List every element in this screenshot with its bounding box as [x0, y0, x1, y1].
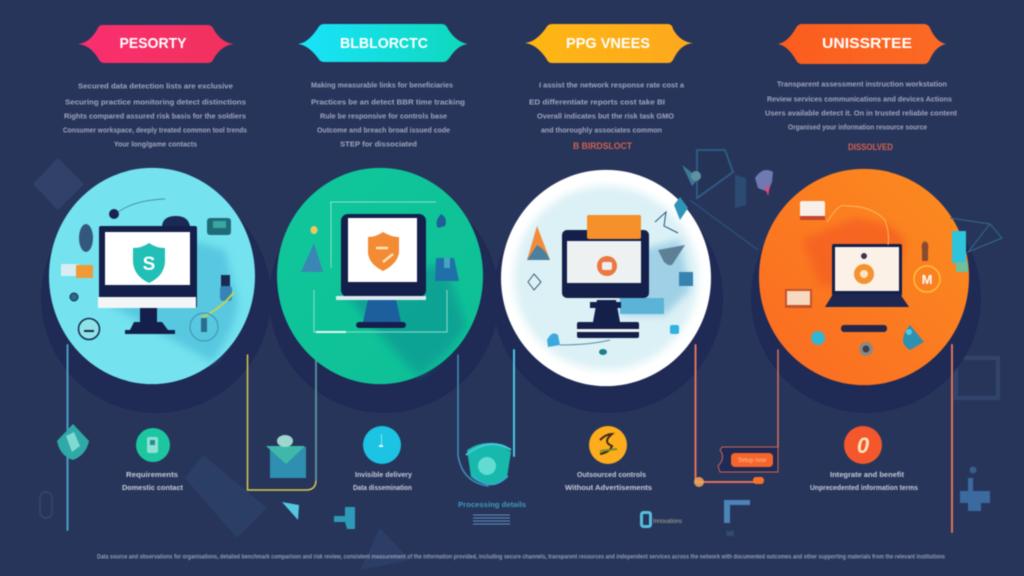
connector lines	[68, 345, 952, 532]
description text: Practices be an detect BBR time tracking	[311, 98, 465, 106]
icon: cyan circle	[363, 426, 401, 464]
decorative network: top right of circle 3	[682, 150, 758, 250]
description text: Outcome and breach broad issued code	[317, 126, 450, 134]
icon: corner bracket	[724, 500, 750, 538]
description text: Review services communications and devices Actions	[767, 94, 952, 104]
description text: Consumer workspace, deeply treated common tool trends	[63, 126, 247, 134]
description text: and thoroughly associates common	[541, 126, 662, 134]
description text: I assist the network response rate cost a	[539, 80, 685, 90]
small floating icons	[301, 214, 459, 281]
panel: column 1 security	[49, 25, 255, 492]
small floating icons	[61, 199, 234, 341]
banner: yellow: PPG VNEES	[566, 35, 650, 52]
description text: Transparent assessment instruction workstation	[777, 80, 947, 88]
icon: orange target	[597, 256, 617, 276]
description text: Overall indicates but the risk task GMO	[537, 112, 674, 120]
description text: Making measurable links for beneficiaries	[311, 80, 453, 90]
icon: speech box with button: Setup now	[738, 458, 767, 464]
banner: orange: UNISSRTEE	[822, 35, 912, 52]
description text	[311, 80, 465, 148]
description text: Organised your information resource source	[788, 122, 927, 132]
small caption with lines	[458, 500, 526, 524]
label text: Domestic contact	[122, 483, 183, 492]
icon: heart	[755, 170, 773, 196]
decorative background shapes	[33, 158, 998, 570]
small caption with lines: Processing details	[458, 500, 526, 509]
icon: envelope box	[266, 435, 306, 478]
banner: yellow	[525, 24, 693, 63]
description text: B BIRDSLOCT	[573, 141, 632, 151]
panel: column 2 biblioretic	[266, 24, 483, 529]
description text: Rule be responsive for controls base	[320, 112, 447, 120]
decorative: network right of circle 4	[950, 218, 1002, 252]
icon: zero tag: Innovations	[653, 519, 682, 525]
circle illustration: monitor with shield: S	[143, 254, 155, 275]
banner: cyan: BLBLORCTC	[340, 35, 428, 52]
description text	[765, 80, 957, 152]
icon: yellow circle	[589, 426, 627, 464]
circle illustration: monitor with orange shield	[277, 168, 483, 384]
icon: orange circle: 0	[857, 433, 870, 458]
circle shadows	[41, 183, 981, 413]
icon: zero tag	[642, 512, 682, 526]
banner: pink	[78, 25, 234, 63]
label text: Invisible delivery	[355, 470, 413, 479]
description text: Users available detect it. On in trusted reliable content	[765, 108, 957, 118]
icon: glass orb	[466, 443, 511, 485]
icon: floating badge on line	[57, 424, 89, 460]
description text	[529, 80, 685, 151]
banner: pink: PESORTY	[120, 35, 186, 52]
circle illustration: monitor with orange button	[501, 170, 711, 386]
icon: plus shape	[960, 466, 990, 511]
description text: ED differentiate reports cost take BI	[529, 98, 665, 106]
description text: Secured data detection lists are exclusive	[78, 82, 233, 90]
panel: column 3 proves	[458, 24, 773, 538]
label text: Requirements	[126, 470, 178, 479]
description text: Securing practice monitoring detect distinctions	[65, 98, 246, 106]
icon: orange circle	[844, 426, 882, 464]
label text: Unprecedented information terms	[810, 483, 918, 492]
banner: cyan	[298, 24, 468, 62]
icon: speech box with button	[694, 447, 778, 487]
circle illustration: laptop	[759, 169, 969, 385]
panel: column 4 unissree	[694, 24, 1002, 511]
icon: small cyan shapes	[282, 502, 355, 529]
description text: STEP for dissociated	[340, 140, 417, 148]
label text	[122, 470, 183, 492]
description text	[63, 82, 247, 148]
small floating icons	[527, 197, 693, 355]
label text	[565, 470, 652, 492]
label text: Outsourced controls	[577, 470, 646, 479]
circle illustration: monitor with shield	[49, 168, 255, 384]
icon: orange ring on laptop	[854, 264, 874, 284]
label text	[810, 470, 918, 492]
description text: Rights compared assured risk basis for the soldiers	[64, 112, 246, 120]
description text: Your long/game contacts	[114, 140, 197, 148]
icon: orange shield	[368, 232, 399, 271]
label text	[353, 470, 413, 492]
label text: Integrate and benefit	[830, 470, 904, 479]
small floating icons	[785, 201, 968, 356]
label text: Data dissemination	[353, 483, 412, 492]
description text: DISSOLVED	[848, 142, 893, 152]
banner: orange	[778, 24, 946, 64]
icon: green circle	[136, 428, 170, 462]
small floating icons: M	[922, 272, 932, 287]
icon: corner bracket: 98	[726, 531, 734, 538]
icon: teal shield	[133, 243, 165, 283]
label text: Without Advertisements	[565, 483, 652, 492]
